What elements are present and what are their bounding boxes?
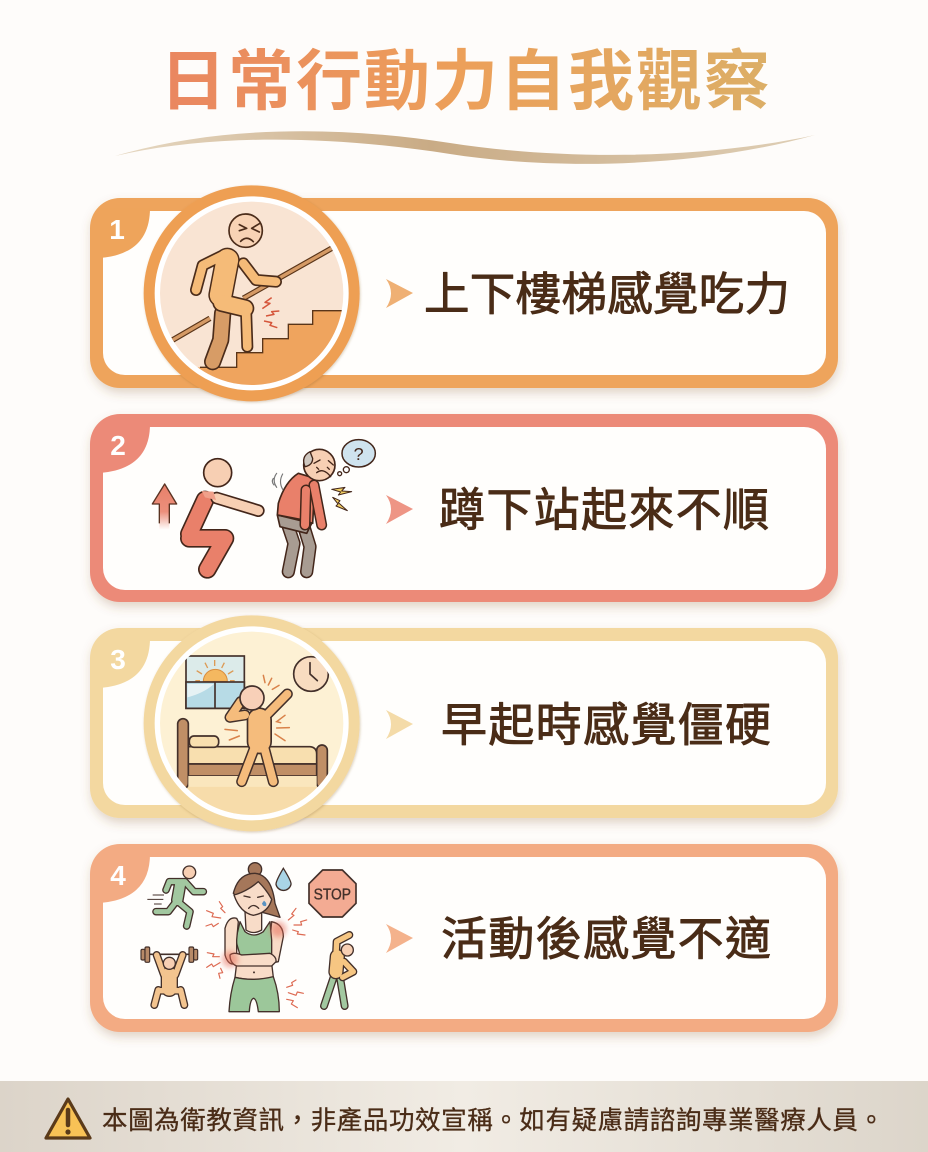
barbell lifter <box>141 947 198 1005</box>
arrow 4 <box>386 924 413 953</box>
arrow 2 <box>386 495 413 524</box>
number badge 3: 3 <box>110 644 126 675</box>
illustration: squat and bent older man <box>152 440 375 572</box>
footer disclaimer <box>0 1081 928 1152</box>
heading 1: 上下樓梯感覺吃力 <box>424 269 790 320</box>
disclaimer text: 本圖為衛教資訊，非產品功效宣稱。如有疑慮請諮詢專業醫療人員。 <box>102 1107 884 1135</box>
illustration: stiff morning in bed <box>144 615 360 831</box>
number badge 1 <box>100 208 150 258</box>
number badge 3 <box>100 638 150 688</box>
number badge 4 <box>100 854 150 903</box>
heading 2: 蹲下站起來不順 <box>439 484 769 536</box>
sore woman <box>222 863 286 1012</box>
panel 4: discomfort after activity <box>90 844 838 1032</box>
pain marks <box>206 902 307 1008</box>
panel 1: stairs <box>90 185 838 401</box>
illustration: squat and bent older man: ? <box>354 444 364 464</box>
icon: warning triangle <box>46 1099 90 1138</box>
heading 4: 活動後感覺不適 <box>441 913 771 965</box>
title swoosh <box>115 131 815 164</box>
heading 3: 早起時感覺僵硬 <box>441 699 771 751</box>
runner <box>147 866 203 926</box>
panel 3: morning stiffness <box>90 615 838 831</box>
water drop <box>276 868 291 890</box>
arrow 1 <box>386 279 413 308</box>
number badge 1: 1 <box>109 214 125 245</box>
number badge 2: 2 <box>110 430 126 461</box>
panel 2: squat <box>90 414 838 602</box>
number badge 4: 4 <box>110 860 126 891</box>
number badge 2 <box>100 424 150 473</box>
stop sign <box>309 870 356 917</box>
title: 日常行動力自我觀察 <box>160 44 770 118</box>
illustration: exercise and soreness <box>141 863 356 1012</box>
stretching person <box>324 935 353 1006</box>
arrow 3 <box>386 710 413 739</box>
stop sign: STOP <box>314 886 351 903</box>
illustration: climbing stairs with knee pain <box>144 185 360 401</box>
